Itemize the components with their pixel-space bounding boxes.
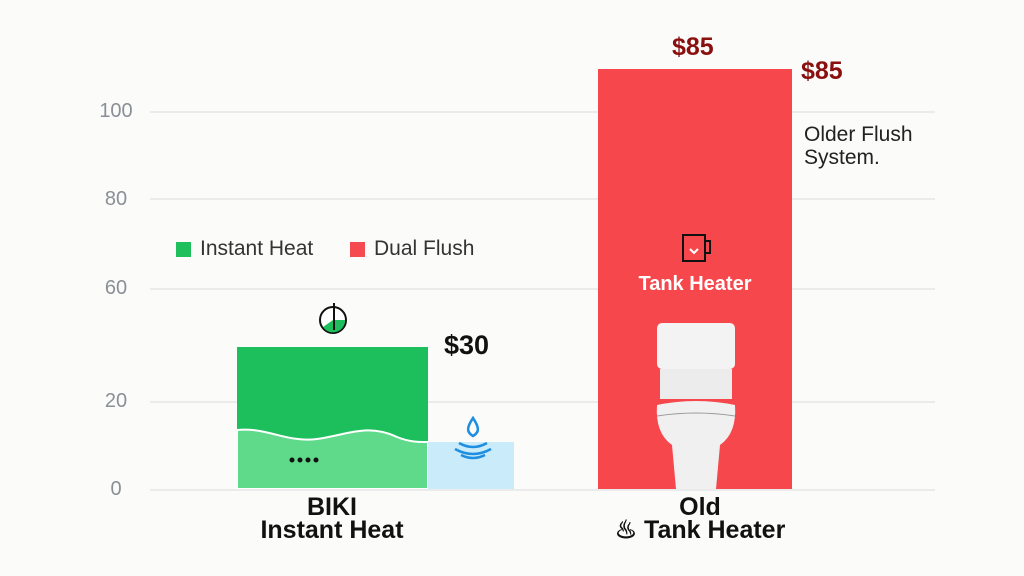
x label BIKI: BIKI <box>307 493 357 521</box>
y axis labels: 0 <box>110 478 122 500</box>
y axis labels: 80 <box>105 188 127 210</box>
y axis labels: 100 <box>99 100 133 122</box>
green bar: BIKI instant heat <box>237 347 514 489</box>
red bar: old tank heater: Tank Heater <box>638 273 752 295</box>
x label Old: ♨ Tank Heater <box>615 516 785 544</box>
x label BIKI <box>260 493 404 544</box>
icon: water ripple <box>455 418 491 458</box>
x label BIKI: Instant Heat <box>260 516 404 544</box>
text: $85 <box>801 57 843 85</box>
legend <box>176 237 474 260</box>
y axis labels: 60 <box>105 277 127 299</box>
legend: Instant Heat <box>200 237 313 260</box>
annotation <box>804 123 913 169</box>
legend: Dual Flush <box>374 237 474 260</box>
y axis labels <box>99 100 133 500</box>
value labels $85: $85 <box>672 33 714 61</box>
x label Old <box>615 493 785 544</box>
annotation: Older Flush <box>804 123 913 146</box>
annotation: System. <box>804 146 880 169</box>
y axis labels: 20 <box>105 390 127 412</box>
icon: drop check <box>319 303 347 334</box>
icon: toilet <box>656 323 736 489</box>
x label Old: Old <box>679 493 721 521</box>
icon: tank <box>682 234 711 262</box>
red bar: old tank heater <box>598 69 792 489</box>
label $30: $30 <box>444 330 489 360</box>
